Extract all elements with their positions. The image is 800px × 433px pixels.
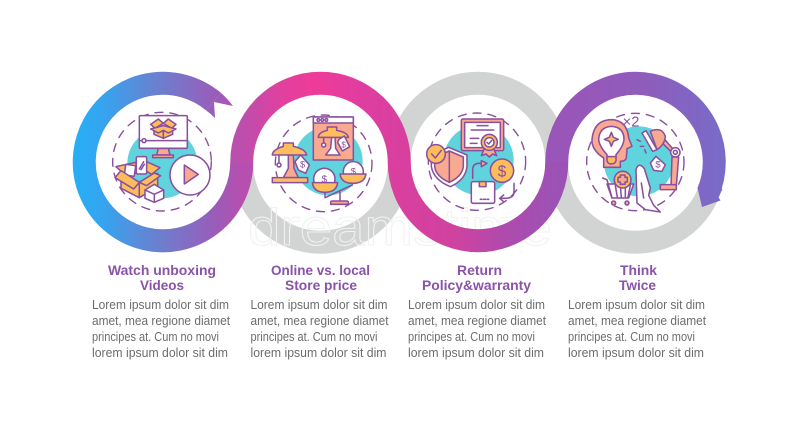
body: principes at. Cum no movi (568, 330, 695, 344)
watermark: dreamstime (248, 199, 552, 257)
play button (170, 155, 210, 195)
certificate (461, 119, 504, 157)
column 4 text (568, 262, 706, 360)
body: amet, mea regione diamet (92, 314, 230, 328)
body (408, 298, 546, 360)
small cube (145, 184, 164, 202)
body (92, 298, 230, 360)
heading: Store price (285, 277, 357, 293)
body: amet, mea regione diamet (408, 314, 546, 328)
body: lorem ipsum dolor sit dim (92, 346, 228, 360)
body: lorem ipsum dolor sit dim (408, 346, 544, 360)
heading: Twice (619, 277, 656, 293)
raised hand (636, 165, 660, 212)
body: amet, mea regione diamet (250, 314, 389, 328)
heading (108, 262, 216, 293)
body (568, 298, 706, 360)
dollar coin: $ (498, 163, 507, 180)
browser window with lamp: $ (341, 140, 346, 149)
balance scale: $ (322, 174, 328, 185)
open cardboard box (115, 157, 161, 198)
heading: Watch unboxing (108, 262, 216, 278)
body: Lorem ipsum dolor sit dim (568, 298, 705, 312)
body: Lorem ipsum dolor sit dim (408, 298, 545, 312)
heading (271, 262, 370, 293)
heading: Online vs. local (271, 262, 370, 278)
heading (619, 262, 657, 293)
ribbon: grey background loops (242, 83, 710, 242)
body: principes at. Cum no movi (408, 330, 535, 344)
loop 4 purple to violet with pointed end (557, 83, 722, 207)
body: lorem ipsum dolor sit dim (568, 346, 704, 360)
monitor (139, 116, 187, 158)
body: Lorem ipsum dolor sit dim (250, 298, 388, 312)
icon: think twice (587, 113, 684, 212)
loop 3 magenta to purple (399, 162, 557, 241)
column 1 text (92, 262, 230, 360)
icon: online vs local price (272, 115, 372, 212)
balance scale: $ (351, 166, 357, 176)
shopping cart with plus (603, 171, 634, 205)
column 2 text (250, 262, 389, 360)
heading: Think (620, 262, 657, 278)
body: lorem ipsum dolor sit dim (250, 346, 386, 360)
heading (422, 262, 531, 293)
heading: Policy&warranty (422, 277, 531, 293)
body: principes at. Cum no movi (92, 330, 219, 344)
body: Lorem ipsum dolor sit dim (92, 298, 229, 312)
shield with check badge (427, 145, 467, 187)
heading: Return (457, 262, 502, 278)
x2 label: ×2 (623, 115, 639, 131)
balance scale (312, 162, 366, 204)
body: principes at. Cum no movi (250, 330, 378, 344)
lamp with tag: $ (655, 160, 661, 170)
body (250, 298, 389, 360)
loop 2 magenta (242, 83, 399, 162)
icon: return policy and warranty (427, 113, 526, 210)
icon: unboxing video (113, 112, 211, 211)
desk lamp with tag: $ (300, 160, 305, 170)
ribbon: coloured winding path (84, 83, 723, 241)
heading: Videos (140, 277, 184, 293)
column 3 text (408, 262, 546, 360)
body: amet, mea regione diamet (568, 314, 706, 328)
parcel with return arrows (471, 161, 514, 203)
head with light bulb (592, 120, 632, 167)
loop 1 blue to purple with notched end (84, 83, 242, 241)
